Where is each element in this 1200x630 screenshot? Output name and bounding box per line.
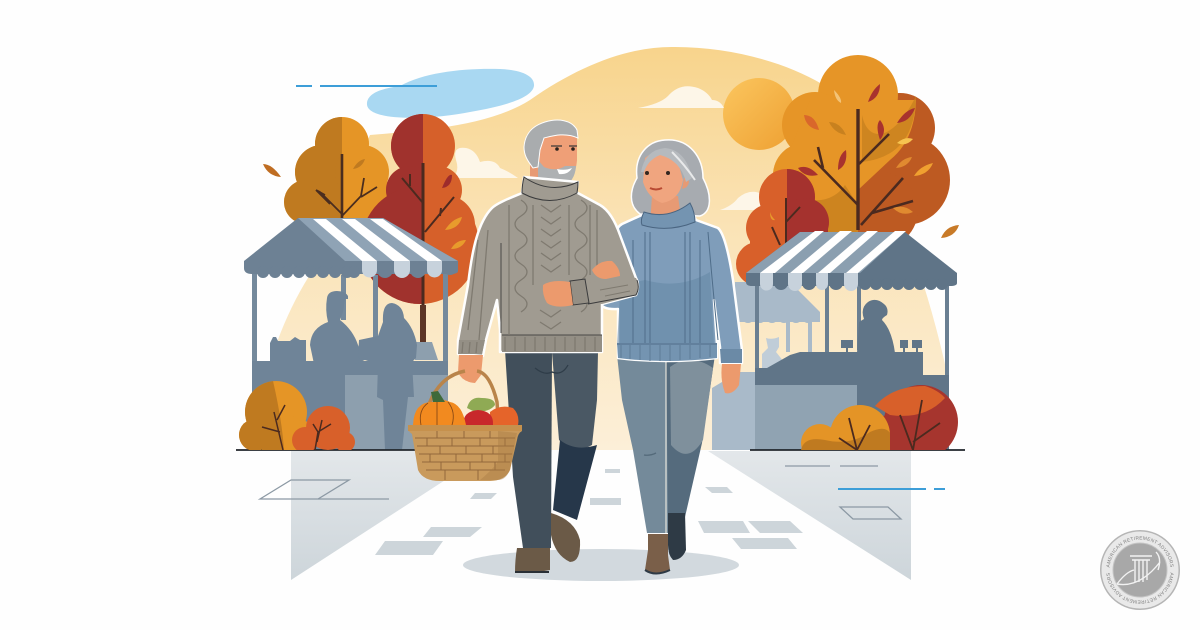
vendor right xyxy=(857,300,895,353)
man xyxy=(458,120,638,572)
woman hair back xyxy=(631,140,709,216)
stall left xyxy=(244,218,458,450)
tree: right small red xyxy=(736,169,829,286)
blue cloud xyxy=(367,69,534,118)
basket xyxy=(408,371,522,481)
background sand hill xyxy=(255,47,947,450)
fruit xyxy=(490,407,518,425)
man fist xyxy=(543,281,573,307)
sun xyxy=(723,78,795,150)
crate xyxy=(270,337,306,362)
back stall: pale blue silhouette xyxy=(712,282,820,450)
man beard xyxy=(538,160,576,188)
falling leaf left xyxy=(263,164,281,177)
stall right counter xyxy=(755,352,949,450)
logo: American Retirement Advisors seal: AMERICAN RETIREMENT ADVISORS xyxy=(1106,572,1174,604)
woman legs xyxy=(617,355,715,574)
logo text: AMERICAN RETIREMENT ADVISORS xyxy=(1106,536,1174,568)
logo column icon xyxy=(1117,552,1160,585)
vendor silhouette xyxy=(310,291,365,364)
man sweater cables xyxy=(462,200,597,353)
ground shadow xyxy=(463,549,739,581)
man arm crossing xyxy=(585,276,638,304)
bushes right xyxy=(801,385,958,451)
paving stones xyxy=(375,469,803,555)
customer silhouette xyxy=(358,303,417,450)
sky dashes xyxy=(296,85,437,87)
man neck/face xyxy=(530,165,572,190)
scallops right xyxy=(774,276,948,290)
logo: American Retirement Advisors seal xyxy=(1100,530,1180,610)
ground markings xyxy=(260,466,945,519)
awning right xyxy=(746,232,957,286)
white clouds xyxy=(452,86,762,210)
bushes left xyxy=(239,381,355,450)
woman xyxy=(600,140,742,573)
woman hand xyxy=(721,364,741,393)
man hand xyxy=(458,355,483,383)
basket body xyxy=(408,425,522,481)
tree: left red xyxy=(361,114,479,343)
price signs xyxy=(841,340,922,353)
woman sweater xyxy=(600,207,742,363)
basket handle xyxy=(429,371,499,431)
stall right xyxy=(746,231,957,450)
woman neck and face xyxy=(650,196,682,225)
tree: left orange xyxy=(284,117,389,221)
man hair xyxy=(524,120,578,168)
tree: right big xyxy=(773,55,950,248)
ground lines xyxy=(236,449,965,451)
man sweater xyxy=(458,177,638,356)
illustration: couple at autumn market xyxy=(236,47,1180,610)
woman hand on arm xyxy=(592,261,620,279)
falling leaf right xyxy=(941,225,959,238)
stall left counter xyxy=(252,361,448,450)
awning left xyxy=(244,218,458,274)
ground: plazas xyxy=(291,451,911,580)
man legs xyxy=(505,350,598,572)
scallops left xyxy=(257,261,457,278)
